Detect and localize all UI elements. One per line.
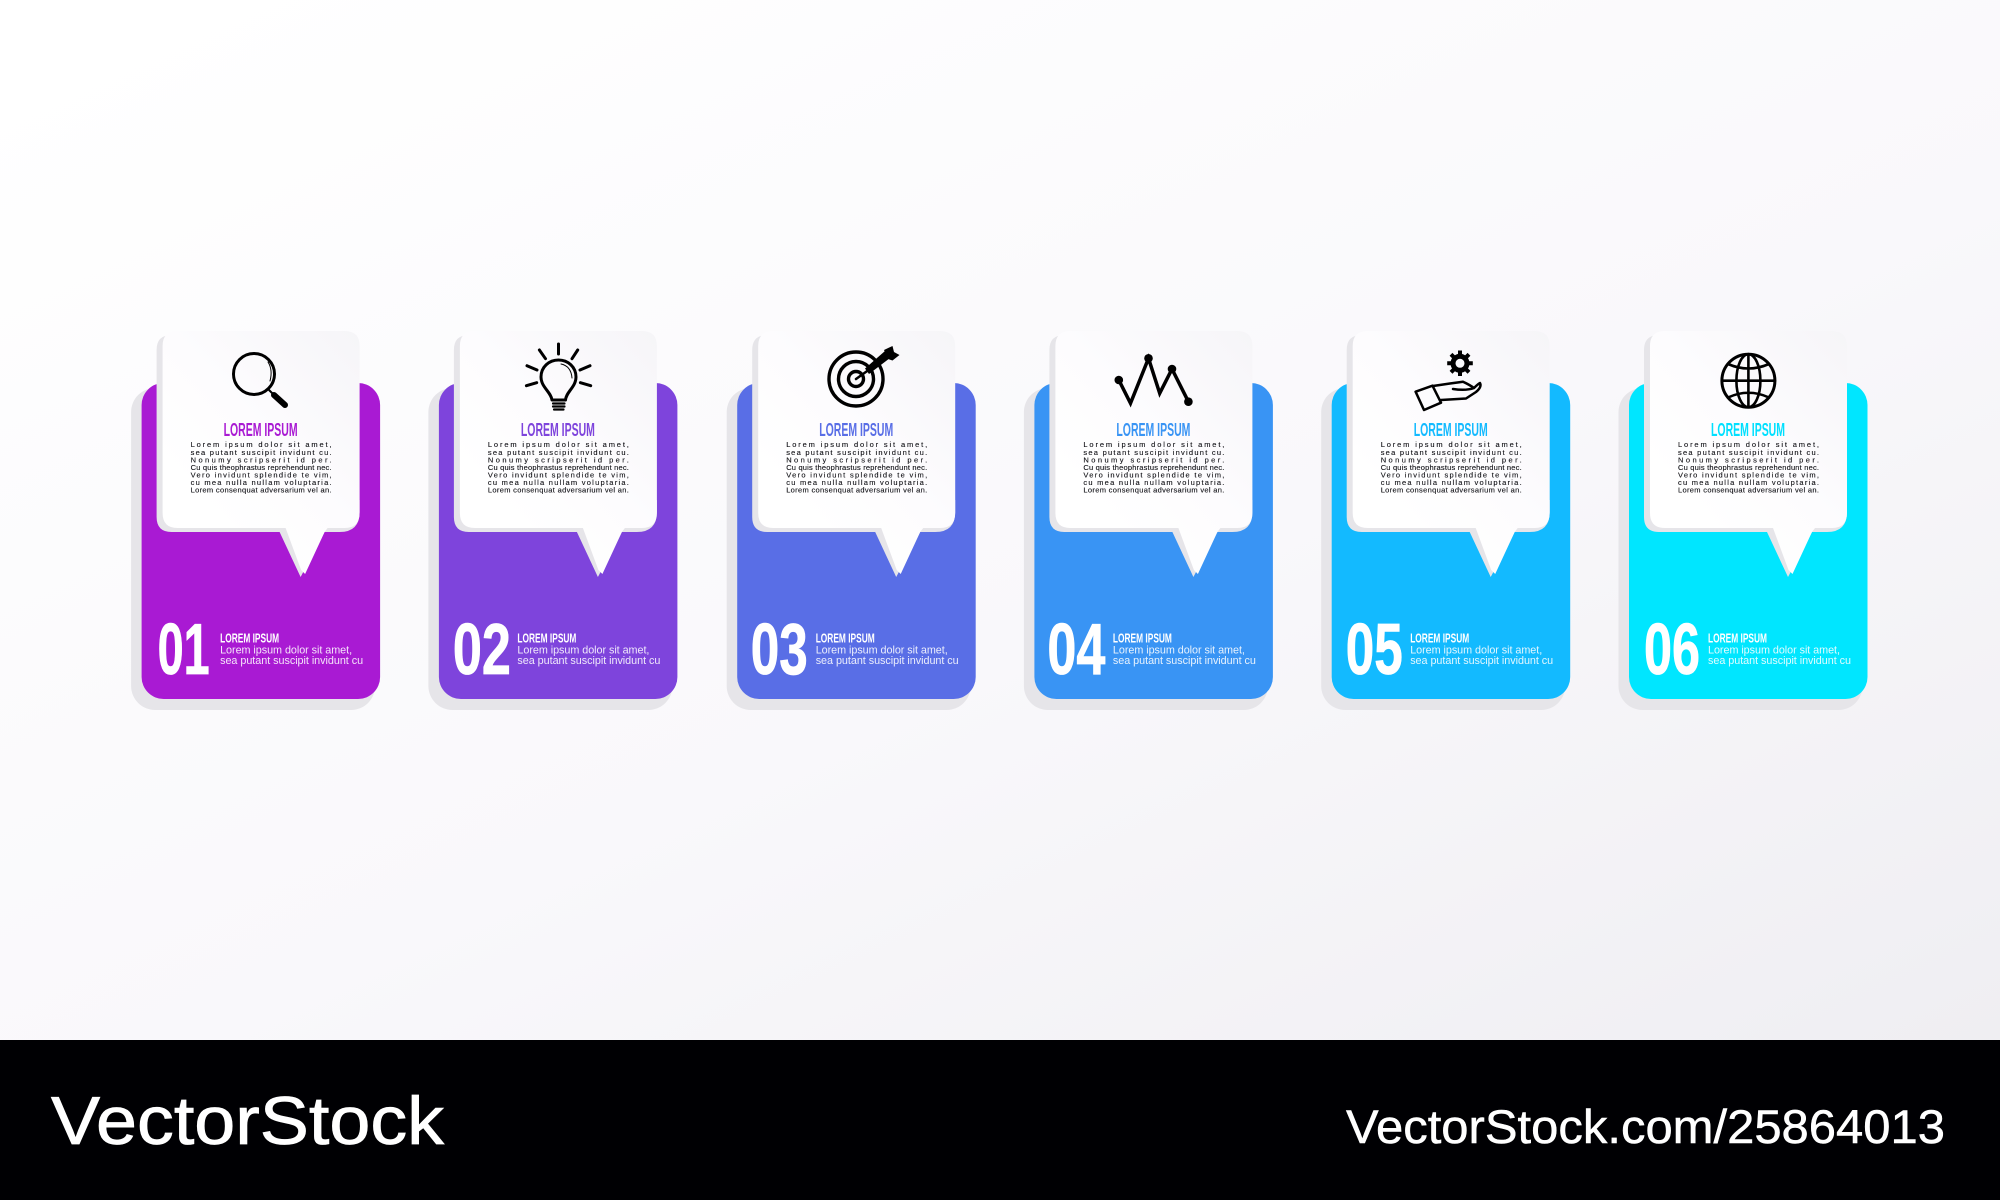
coloured card: [1332, 383, 1570, 699]
panel: step 06: [1618, 331, 1868, 710]
card shadow: [727, 388, 971, 710]
description: Lorem ipsum dolor sit amet,: [786, 440, 927, 449]
icon: magnifier: [234, 354, 285, 405]
speech bubble: [1049, 331, 1252, 577]
panel: step 02: [428, 331, 677, 710]
footer bar: [0, 1040, 2000, 1200]
description: Vero invidunt splendide te vim,: [786, 471, 927, 480]
footer text: LOREM IPSUM: [220, 630, 279, 646]
heading: LOREM IPSUM: [819, 420, 893, 440]
icon: hand holding gear: [1416, 350, 1480, 410]
description: sea putant suscipit invidunt cu.: [786, 448, 927, 457]
description: Vero invidunt splendide te vim,: [1678, 471, 1819, 480]
heading: LOREM IPSUM: [1711, 420, 1785, 440]
description: Lorem ipsum dolor sit amet,: [488, 440, 629, 449]
description: Lorem ipsum dolor sit amet,: [191, 440, 332, 449]
panel: step 03: [727, 331, 976, 710]
number: 06: [1644, 610, 1700, 690]
description: Nonumy scripserit id per.: [488, 456, 629, 464]
icon: target: [829, 346, 900, 406]
speech bubble: [752, 331, 955, 577]
description: [786, 440, 927, 495]
footer text: [220, 630, 363, 667]
card shadow: [428, 388, 672, 710]
description: [1678, 440, 1819, 495]
description: sea putant suscipit invidunt cu.: [1381, 448, 1522, 457]
card shadow: [1321, 388, 1565, 710]
description: [1083, 440, 1224, 495]
footer text: Lorem ipsum dolor sit amet,: [816, 644, 948, 656]
description: Nonumy scripserit id per.: [1678, 456, 1819, 464]
card shadow: [1024, 388, 1268, 710]
description: cu mea nulla nullam voluptaria.: [786, 478, 927, 487]
description: sea putant suscipit invidunt cu.: [1083, 448, 1224, 457]
description: [191, 440, 332, 495]
coloured card: [737, 383, 976, 699]
footer text: LOREM IPSUM: [1113, 630, 1172, 646]
heading: LOREM IPSUM: [1414, 420, 1488, 440]
description: Cu quis theophrastus reprehendunt nec.: [786, 463, 927, 472]
icon: globe: [1722, 354, 1775, 407]
description: Nonumy scripserit id per.: [1083, 456, 1224, 464]
footer text: LOREM IPSUM: [1410, 630, 1469, 646]
coloured card: [1034, 383, 1273, 699]
speech bubble: [1644, 331, 1847, 577]
number: 01: [158, 610, 210, 690]
footer text: Lorem ipsum dolor sit amet,: [220, 644, 352, 656]
description: Vero invidunt splendide te vim,: [488, 471, 629, 480]
footer text: LOREM IPSUM: [816, 630, 875, 646]
footer text: sea putant suscipit invidunt cu: [1410, 655, 1553, 667]
description: Lorem consenquat adversarium vel an.: [1678, 486, 1819, 495]
description: cu mea nulla nullam voluptaria.: [1083, 478, 1224, 487]
description: Vero invidunt splendide te vim,: [1381, 471, 1522, 480]
footer text: sea putant suscipit invidunt cu: [220, 655, 363, 667]
coloured card: [439, 383, 677, 699]
footer text: sea putant suscipit invidunt cu: [1113, 655, 1256, 667]
footer text: sea putant suscipit invidunt cu: [517, 655, 660, 667]
speech bubble: [1347, 331, 1550, 577]
description: Nonumy scripserit id per.: [1381, 456, 1522, 464]
footer text: [816, 630, 959, 667]
number: 05: [1346, 610, 1403, 690]
number: 03: [751, 610, 808, 690]
footer text: [517, 630, 660, 667]
description: Cu quis theophrastus reprehendunt nec.: [191, 463, 332, 472]
description: cu mea nulla nullam voluptaria.: [488, 478, 629, 487]
panel: step 05: [1321, 331, 1570, 710]
number: 02: [453, 610, 511, 690]
description: Vero invidunt splendide te vim,: [191, 471, 332, 480]
coloured card: [1629, 383, 1868, 699]
description: [1381, 440, 1522, 495]
brand wordmark: VectorStock: [51, 1083, 445, 1159]
description: sea putant suscipit invidunt cu.: [488, 448, 629, 457]
footer text: Lorem ipsum dolor sit amet,: [1410, 644, 1542, 656]
description: cu mea nulla nullam voluptaria.: [1678, 478, 1819, 487]
panel: step 01: [131, 331, 380, 710]
heading: LOREM IPSUM: [1116, 420, 1190, 440]
description: sea putant suscipit invidunt cu.: [1678, 448, 1819, 457]
footer text: Lorem ipsum dolor sit amet,: [1708, 644, 1840, 656]
description: sea putant suscipit invidunt cu.: [191, 448, 332, 457]
coloured card: [142, 383, 380, 699]
footer text: [1113, 630, 1256, 667]
footer text: [1708, 630, 1851, 667]
description: Lorem consenquat adversarium vel an.: [191, 486, 332, 495]
description: Nonumy scripserit id per.: [191, 456, 332, 464]
description: Lorem consenquat adversarium vel an.: [488, 486, 629, 495]
footer text: [1410, 630, 1553, 667]
description: Lorem consenquat adversarium vel an.: [1083, 486, 1224, 495]
description: Lorem ipsum dolor sit amet,: [1381, 440, 1522, 449]
description: Lorem ipsum dolor sit amet,: [1678, 440, 1819, 449]
description: cu mea nulla nullam voluptaria.: [191, 478, 332, 487]
card shadow: [1618, 388, 1862, 710]
heading: LOREM IPSUM: [521, 420, 595, 440]
description: Cu quis theophrastus reprehendunt nec.: [1381, 463, 1522, 472]
footer text: sea putant suscipit invidunt cu: [816, 655, 959, 667]
icon: light bulb: [526, 344, 591, 410]
image id url: VectorStock.com/25864013: [1346, 1100, 1945, 1153]
heading: LOREM IPSUM: [224, 420, 298, 440]
description: Lorem consenquat adversarium vel an.: [1381, 486, 1522, 495]
description: Cu quis theophrastus reprehendunt nec.: [1678, 463, 1819, 472]
description: Lorem ipsum dolor sit amet,: [1083, 440, 1224, 449]
card shadow: [131, 388, 375, 710]
description: Cu quis theophrastus reprehendunt nec.: [1083, 463, 1224, 472]
icon: zigzag line chart: [1114, 354, 1193, 406]
description: cu mea nulla nullam voluptaria.: [1381, 478, 1522, 487]
description: Nonumy scripserit id per.: [786, 456, 927, 464]
description: Lorem consenquat adversarium vel an.: [786, 486, 927, 495]
footer text: LOREM IPSUM: [517, 630, 576, 646]
footer text: Lorem ipsum dolor sit amet,: [1113, 644, 1245, 656]
footer text: sea putant suscipit invidunt cu: [1708, 655, 1851, 667]
footer text: Lorem ipsum dolor sit amet,: [517, 644, 649, 656]
number: 04: [1047, 610, 1105, 690]
description: Cu quis theophrastus reprehendunt nec.: [488, 463, 629, 472]
description: [488, 440, 629, 495]
speech bubble: [454, 331, 657, 577]
panel: step 04: [1024, 331, 1273, 710]
description: Vero invidunt splendide te vim,: [1083, 471, 1224, 480]
speech bubble: [157, 331, 360, 577]
footer text: LOREM IPSUM: [1708, 630, 1767, 646]
